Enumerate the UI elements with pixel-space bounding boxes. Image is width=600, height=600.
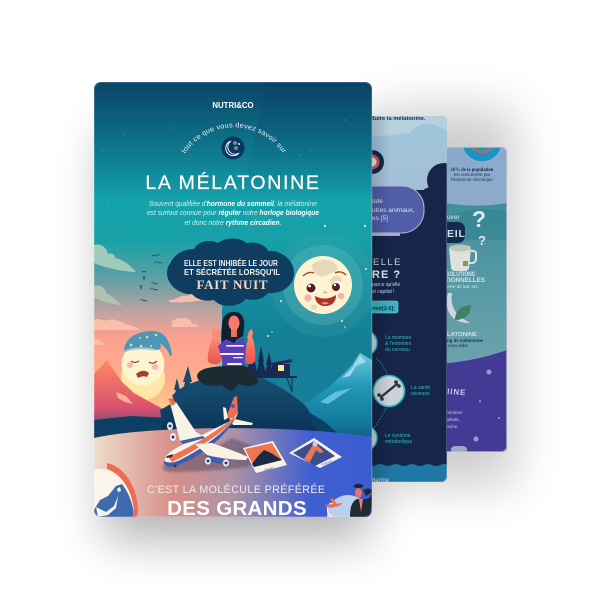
heading: mélatonine fragment: IINE: [447, 387, 467, 397]
cabin: [268, 359, 297, 392]
cloud text line 3: FAIT NUIT: [196, 277, 268, 292]
sun: [121, 356, 165, 400]
purple body text: onine.: [446, 424, 459, 429]
insomnia statistic: 16% de la population: [451, 168, 494, 173]
dark label: sommeil: EIL: [447, 228, 466, 240]
brand logo: NUTRI&CO: [212, 101, 254, 110]
icon: mug: [449, 244, 476, 271]
text fragment: derme: derme: [372, 478, 390, 484]
hands: [212, 326, 221, 343]
panel: back page: [447, 147, 507, 452]
heading: pourquoi elle: ELLE: [373, 257, 402, 268]
text: mémoire: du cerveau: [385, 347, 410, 353]
intro paragraph line 1: Souvent qualifiée d'hormone du sommeil, la mélatonine: [149, 199, 317, 208]
icon: question marks: ?: [472, 206, 486, 232]
upper wing: [170, 402, 203, 441]
tagline: C'EST LA MOLÉCULE PRÉFÉRÉE: [147, 483, 325, 496]
lower wing: [195, 443, 248, 460]
heading: mélatonine: LATONINE: [447, 332, 477, 338]
speech cloud: [167, 238, 294, 306]
text: aider: vous aider: [448, 343, 469, 348]
smiling moon: [271, 233, 375, 337]
hill: [160, 376, 322, 440]
back page outline: [430, 148, 506, 452]
dark label: sommeil: [447, 222, 465, 243]
cloud text line 1: ELLE EST INHIBÉE LE JOUR: [184, 259, 278, 268]
tail: [227, 396, 238, 424]
teal section: [447, 203, 507, 364]
mountains left: [94, 360, 190, 440]
fuselage: [165, 413, 238, 466]
text: mémoire: [385, 335, 412, 351]
bottle top: [451, 446, 467, 452]
insomnia statistic line 2: est concernée par: [454, 172, 491, 177]
body text line 2: st capital !: [372, 289, 395, 295]
caption: verre de lait, etc.: [445, 284, 479, 289]
icon: question marks: ?: [478, 233, 486, 248]
stars: [474, 370, 500, 442]
insomnia statistic line 3: l'insomnie chronique: [451, 177, 493, 182]
cloud text line 2: ET SÉCRÉTÉE LORSQU'IL: [184, 268, 280, 277]
sky left sunset: [94, 240, 234, 415]
text: mémoire: & l'entretien: [385, 341, 411, 347]
birds: [140, 255, 162, 301]
fuselage stripe: [168, 416, 236, 462]
text: mémoire: La mémoire: [385, 335, 412, 341]
panel: middle page: [372, 116, 447, 482]
middle page outline: [372, 116, 446, 482]
text: santé osseuse: [411, 385, 430, 395]
globe: [66, 463, 138, 537]
purple body text: gétale,: [446, 417, 460, 422]
arms: [208, 337, 223, 364]
icon: question marks: [473, 211, 486, 245]
blue wave footer: [372, 464, 447, 482]
drop shadow: [105, 110, 515, 540]
purple section: [447, 350, 507, 452]
stabilisers: [230, 418, 253, 425]
text: dose: ng de mélatonine: [447, 338, 484, 343]
heading: des grands: DES GRANDS: [167, 497, 307, 520]
ground: [94, 428, 372, 517]
teal button: rmir[2-5]:: [372, 306, 395, 312]
pilot: [350, 484, 372, 517]
body text: parce qu'elle: [372, 282, 400, 288]
neck and face: [231, 329, 237, 337]
icon: metabolism badge: [372, 427, 378, 449]
icon: clock: [462, 147, 502, 162]
cockpit: [166, 454, 173, 458]
clouds left: [94, 244, 205, 345]
icon: moon badge: [222, 136, 244, 160]
heading: fragment: RE ?: [372, 269, 401, 281]
postcard: japan: Japon: [263, 466, 274, 472]
globe right: [324, 495, 369, 537]
wheels and engines: [205, 455, 224, 464]
text: santé osseuse: osseuse: [411, 391, 430, 397]
sleepy moon: [122, 331, 172, 386]
arched subtitle: tout ce que vous devez savoir sur: [182, 122, 286, 153]
text fragment top: duire la mélatonine.: [371, 116, 426, 122]
purple body text: [447, 410, 462, 428]
airplane: [164, 396, 253, 468]
icon: moon and leaf: [447, 293, 471, 323]
glow stars: [267, 225, 367, 337]
purple callout: ode: [372, 198, 383, 205]
stars: [101, 119, 351, 226]
sky right: [222, 240, 372, 420]
icon: bone badge: [374, 376, 404, 406]
main title: LA MÉLATONINE: [145, 171, 321, 194]
purple callout: utres animaux,: [372, 207, 415, 214]
icon: brain badge: [372, 332, 378, 354]
front page outline: [94, 82, 372, 516]
icon: heart badge: [372, 150, 384, 174]
night cap: [124, 331, 172, 356]
text: santé osseuse: La santé: [411, 385, 430, 391]
mountains right: [290, 353, 372, 440]
purple callout: es [5]: [372, 215, 388, 222]
airplane shadow: [162, 438, 255, 472]
postcard: japan: [243, 441, 287, 473]
dark cloud: [400, 163, 447, 236]
meditating woman: [197, 312, 258, 391]
text: métabolique: métabolique: [385, 439, 412, 445]
pine trees: [172, 366, 195, 403]
heading: solutions: SOLUTIONS: [446, 272, 475, 278]
light beam: [241, 82, 372, 200]
postcard: paris: [289, 438, 342, 468]
text: métabolique: Le système: [385, 433, 411, 439]
text: métabolique: [385, 433, 412, 445]
dotted connector: [374, 358, 387, 428]
intro paragraph line 3: et donc notre rythme circadien.: [184, 218, 282, 227]
crossed legs: [197, 366, 258, 391]
postcard: paris: France: [321, 459, 332, 467]
teal button: [372, 300, 398, 314]
intro paragraph line 2: est surtout connue pour réguler notre horloge biologique: [147, 208, 319, 217]
panel: front page: [94, 82, 372, 517]
purple body text: bération: [446, 410, 463, 415]
lower dark valley: [94, 400, 345, 440]
heading: nutritionnelles: TIONNELLES: [445, 278, 485, 284]
upper engines: [167, 422, 173, 430]
purple callout: [372, 186, 424, 234]
hair: [221, 312, 244, 358]
text fragment: trouver: uver: [447, 214, 460, 221]
fuselage belly: [164, 419, 235, 467]
torso: [218, 338, 246, 366]
